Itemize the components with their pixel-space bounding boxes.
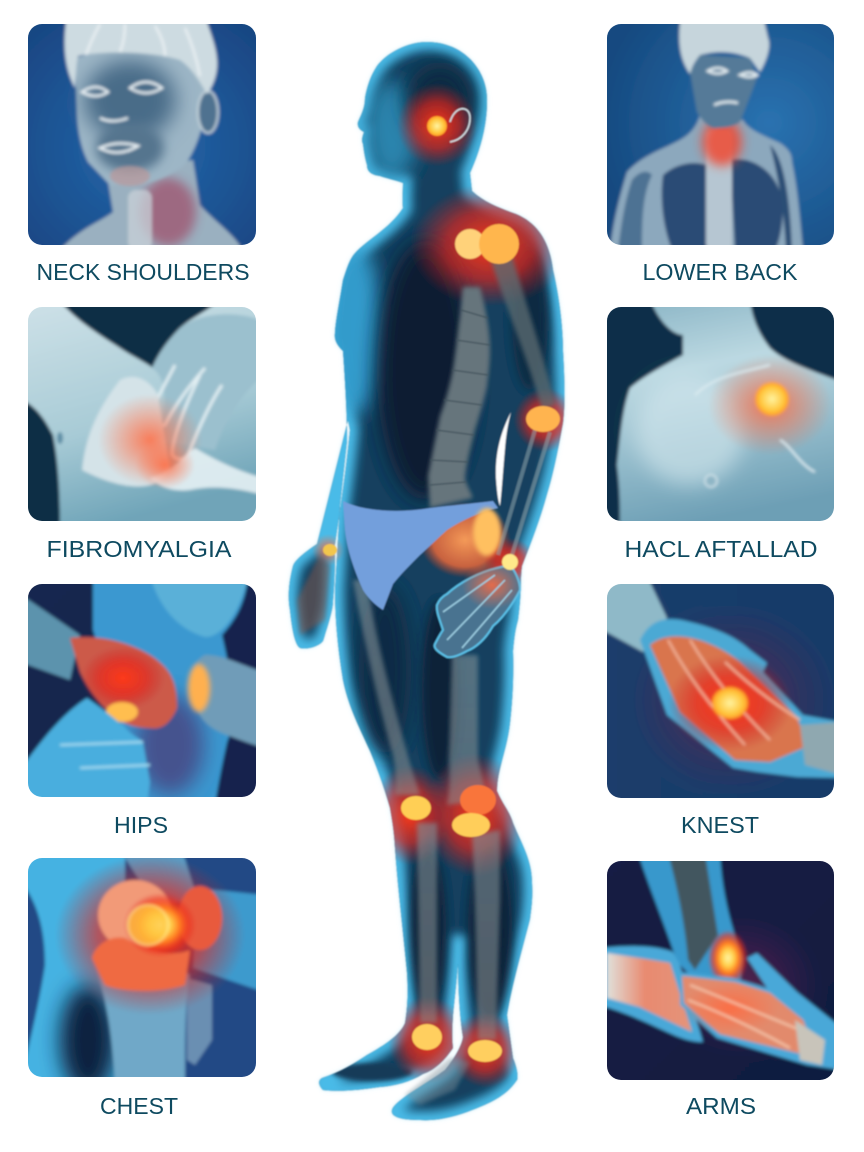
back condyle: [178, 886, 222, 950]
panel background: [607, 24, 834, 245]
body fill: [289, 42, 564, 1120]
arm crease: [780, 440, 815, 472]
right ankle: [468, 1040, 502, 1062]
knee red halo: [55, 855, 245, 1015]
clutching fingers: [82, 377, 170, 486]
purple halo: [655, 910, 825, 1060]
dark left thigh core: [359, 585, 411, 755]
left ankle glow: [388, 996, 468, 1084]
nipple: [57, 432, 63, 444]
face: [150, 576, 248, 637]
panel: arms: [599, 853, 842, 1088]
chest bright side: [327, 245, 383, 415]
left femur: [353, 580, 420, 795]
chest highlight: [635, 375, 745, 485]
right hand rim: [680, 953, 842, 1070]
glowing joint: [712, 687, 748, 719]
inner edge glow: [289, 42, 564, 1120]
shoulder pain glow: [712, 356, 828, 451]
right ankle glow: [449, 1012, 521, 1088]
right lung: [730, 159, 783, 250]
wrist glow: [484, 538, 536, 586]
wrist block: [795, 1020, 825, 1065]
forearm from the left: [20, 594, 80, 680]
panel background: [599, 853, 842, 1088]
hair: [65, 16, 217, 94]
right knee upper: [460, 785, 496, 815]
hand hot spot: [106, 702, 138, 722]
dark head core: [406, 62, 474, 138]
hair strands: [86, 24, 200, 76]
forearm: [599, 576, 667, 652]
panel background: [20, 576, 264, 805]
clipped interior shading: [289, 42, 577, 1120]
collar bone: [695, 365, 770, 395]
lower face shadow: [96, 124, 164, 172]
left ankle: [412, 1024, 442, 1050]
panel: lower back: [607, 24, 834, 245]
elbow joint: [526, 406, 560, 432]
panel: chest: [20, 850, 264, 1095]
right hand interior: [682, 976, 818, 1058]
body: [617, 299, 842, 529]
underwear: [343, 501, 498, 610]
wrist block: [800, 722, 842, 775]
label: hacl aftallad: HACL AFTALLAD: [624, 536, 818, 562]
left hand bones: [607, 953, 692, 1032]
panel background: [20, 850, 264, 1085]
left hand: [70, 637, 177, 728]
dark lower limb core: [60, 985, 116, 1095]
hip bone: [473, 508, 501, 556]
finger lines: [688, 985, 800, 1048]
ear glow: [397, 83, 477, 167]
elbow glow: [513, 388, 577, 452]
left wrist glow: [312, 534, 344, 566]
label: chest: CHEST: [100, 1093, 178, 1119]
panel background: [599, 576, 842, 806]
outer body halo: [289, 42, 564, 1120]
left wrist joint: [323, 544, 337, 556]
wrist joint: [502, 554, 518, 570]
upper condyle: [98, 880, 172, 950]
ankle glow: [708, 930, 748, 986]
panel: hips: [20, 576, 264, 805]
dark arm core: [512, 250, 548, 390]
dark right shin core: [468, 840, 512, 1020]
spine: [706, 130, 732, 250]
chin texture: [110, 166, 150, 186]
ear joint: [427, 116, 447, 136]
leg bones: [668, 853, 718, 970]
dark right thigh core: [422, 600, 458, 780]
left knee: [401, 796, 431, 820]
hand red glow: [81, 646, 165, 710]
dark left foot core: [332, 1063, 412, 1081]
lower condyle: [92, 937, 190, 991]
panel background: [607, 307, 834, 521]
tendon strip: [120, 850, 198, 905]
right femur: [447, 655, 488, 805]
foot bones: [405, 1058, 470, 1105]
lower bone: [92, 945, 190, 1085]
pain glow: [101, 396, 198, 483]
forearm bones: [498, 430, 550, 555]
hair: [679, 16, 769, 74]
right knee lower: [452, 813, 490, 837]
left tibia: [417, 823, 437, 1023]
eyes, nose and mouth: [82, 82, 162, 153]
finger shadows: [152, 365, 222, 459]
neck pain tint: [140, 178, 196, 246]
glowing joint: [124, 893, 196, 957]
translucent torso: [610, 115, 803, 250]
label: neck shoulders: NECK SHOULDERS: [36, 259, 250, 285]
dark chest core: [377, 240, 473, 500]
lower leg: [638, 853, 743, 985]
forearm pain tint: [138, 444, 194, 488]
face: [75, 40, 207, 185]
left knee glow: [370, 765, 450, 865]
panel background: [28, 24, 256, 245]
finger lines: [668, 640, 800, 745]
right hand: [435, 565, 520, 657]
face bright side: [366, 80, 418, 180]
lower fingers: [60, 742, 150, 768]
right arm shadow: [770, 145, 792, 250]
neck pain red: [702, 118, 742, 166]
humerus: [490, 256, 555, 410]
upper hand shadow: [152, 314, 264, 450]
panel: knest: [599, 576, 842, 806]
vertebra lines: [430, 310, 490, 485]
panel: hacl aftallad: [607, 307, 834, 521]
fingers: [187, 978, 212, 1065]
shoulder joints: [455, 224, 519, 264]
central anatomical figure: [289, 42, 577, 1120]
spine column: [428, 287, 490, 508]
face: [690, 55, 757, 128]
right tibia: [472, 830, 500, 1040]
shoulders and neck: [60, 160, 243, 250]
dark face centre: [84, 60, 176, 140]
hand interior: [650, 637, 810, 762]
hand rim: [640, 619, 842, 778]
lower hand: [20, 698, 150, 805]
panel: fibromyalgia: [28, 307, 256, 521]
dark left shin core: [410, 845, 446, 1015]
throat column: [128, 190, 152, 250]
label: hips: HIPS: [114, 812, 168, 838]
right hand glow: [188, 664, 210, 712]
hip glow: [419, 502, 511, 578]
pale body: [28, 307, 256, 521]
arm shadow: [618, 172, 652, 250]
left hand bones: [297, 558, 330, 635]
panel background: [28, 307, 214, 521]
torso purple shadow: [136, 695, 204, 795]
label: lower back: LOWER BACK: [642, 259, 798, 285]
palm glow: [682, 982, 778, 1034]
ear: [198, 91, 218, 133]
right hand glow: [462, 561, 522, 609]
glowing joint ball: [755, 382, 789, 416]
purple halo: [625, 605, 835, 795]
joint ring: [128, 905, 168, 945]
label: knest: KNEST: [681, 812, 759, 838]
label: fibromyalgia: FIBROMYALGIA: [46, 536, 232, 562]
panel: neck shoulders: [28, 24, 256, 245]
right hand fingers: [443, 575, 512, 648]
arm gap: [496, 412, 511, 506]
ear outline: [450, 109, 470, 142]
eyes and mouth: [708, 68, 757, 105]
left limb: [20, 850, 125, 1085]
right arm: [193, 888, 264, 992]
nipple: [705, 475, 717, 487]
label: arms: ARMS: [686, 1093, 756, 1119]
right arm: [192, 655, 264, 748]
left lung: [662, 163, 713, 250]
left hand: [599, 946, 703, 1042]
right knee glow: [423, 753, 527, 877]
forearm: [150, 448, 264, 495]
torso: [93, 576, 248, 805]
orange glow: [668, 655, 792, 751]
shoulder glow: [410, 183, 570, 307]
